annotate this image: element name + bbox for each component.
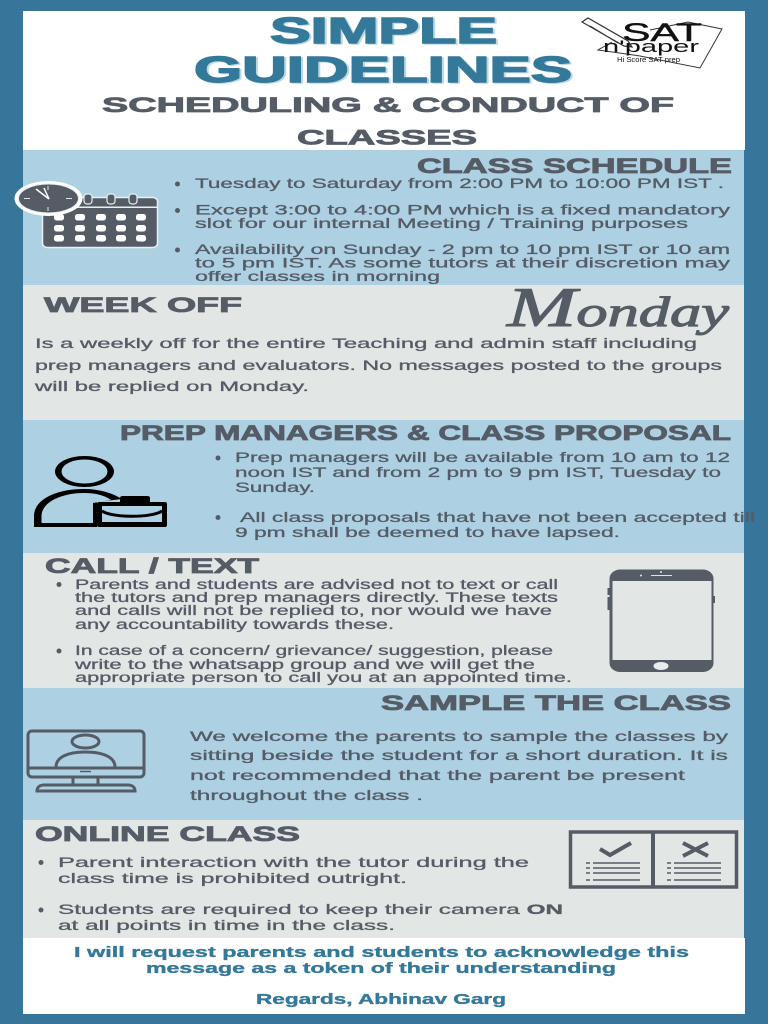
text: call bullets: appropriate person to call you at an appointed time.: [75, 670, 572, 685]
text: call bullets: In case of a concern/ grievance/ suggestion, please: [75, 643, 553, 658]
icon: SAT n paper logo: Hi Score SAT prep: [617, 57, 680, 64]
panel: closing message: [23, 938, 745, 1014]
text: schedule bullets: offer classes in morning: [195, 268, 440, 284]
text: week off description: prep managers and evaluators. No messages posted to the groups: [35, 357, 722, 373]
title: GUIDELINES: [194, 49, 572, 90]
text: prep manager bullets: 9 pm shall be deemed to have lapsed.: [235, 524, 620, 540]
text: schedule bullets: Tuesday to Saturday from 2:00 PM to 10:00 PM IST .: [195, 175, 724, 191]
text: online bullets: Parent interaction with the tutor during the: [58, 854, 529, 870]
title: SIMPLE: [270, 10, 497, 51]
icon: smartphone: [608, 570, 715, 672]
panel: online class: [23, 820, 744, 938]
text: call bullets: any accountability towards these.: [75, 617, 394, 632]
text: acknowledgement request: [74, 945, 689, 977]
text: online bullets: Students are required to keep their camera ON: [58, 901, 563, 917]
subtitle: CLASSES: [297, 126, 477, 150]
text: acknowledgement request: I will request parents and students to acknowledge this: [74, 945, 689, 961]
text: schedule bullets: [175, 175, 730, 284]
heading: class schedule: CLASS SCHEDULE: [417, 155, 732, 178]
text: schedule bullets: Availability on Sunday - 2 pm to 10 pm IST or 10 am: [195, 241, 730, 257]
panel: class schedule: [14, 150, 744, 285]
title: [194, 10, 574, 91]
text: online bullets: at all points in time in the class.: [58, 917, 395, 933]
text: regards: Regards, Abhinav Garg: [256, 992, 506, 1008]
text: sample description: throughout the class .: [190, 787, 423, 803]
text: online bullets: [38, 854, 563, 933]
panel: prep managers: [23, 420, 755, 553]
icon: person with briefcase: [34, 456, 167, 527]
text: prep manager bullets: noon IST and from 2 pm to 9 pm IST, Tuesday to: [235, 464, 721, 480]
text: sample description: not recommended that the parent be present: [190, 767, 685, 783]
text: sample description: We welcome the parents to sample the classes by: [190, 728, 728, 744]
text: week off description: [33, 335, 722, 394]
panel: header: [23, 10, 745, 150]
icon: check and cross list: [570, 832, 736, 887]
text: online bullets: class time is prohibited outright.: [58, 870, 407, 886]
text: call bullets: [56, 577, 572, 685]
panel: call / text: [23, 553, 744, 688]
text: sample description: [190, 728, 728, 803]
text: prep manager bullets: Prep managers will be available from 10 am to 12: [235, 449, 730, 465]
text: prep manager bullets: [216, 449, 755, 540]
icon: monitor with person: [28, 731, 144, 791]
subtitle: SCHEDULING & CONDUCT OF: [102, 94, 674, 117]
panel: week off: [23, 277, 744, 420]
text: call bullets: write to the whatsapp group and we will get the: [73, 657, 535, 672]
text: prep manager bullets: All class proposals that have not been accepted till: [240, 509, 755, 525]
heading: prep managers: PREP MANAGERS & CLASS PROPOSAL: [120, 422, 731, 445]
text: acknowledgement request: message as a token of their understanding: [146, 961, 616, 977]
text: Monday script: M onday: [506, 277, 730, 339]
heading: week off: WEEK OFF: [44, 294, 242, 317]
text: schedule bullets: Except 3:00 to 4:00 PM which is a fixed mandatory: [195, 202, 730, 218]
text: call bullets: and calls will not be replied to, nor would we have: [75, 603, 552, 618]
icon: SAT n paper logo: SAT: [622, 19, 702, 47]
text: week off description: will be replied on Monday.: [33, 378, 309, 394]
heading: sample the class: SAMPLE THE CLASS: [381, 692, 731, 715]
heading: online class: ONLINE CLASS: [35, 823, 300, 846]
panel: sample the class: [23, 688, 744, 820]
icon: SAT n paper logo: [582, 18, 722, 68]
title: SIMPLE: [272, 11, 499, 52]
icon: SAT n paper logo: n'paper: [603, 37, 700, 56]
text: week off description: Is a weekly off for the entire Teaching and admin staff including: [35, 335, 697, 351]
icon: calendar and clock: [14, 181, 158, 248]
text: schedule bullets: to 5 pm IST. As some tutors at their discretion may: [195, 254, 730, 270]
text: call bullets: Parents and students are advised not to text or call: [75, 577, 558, 592]
title: GUIDELINES: [196, 50, 574, 91]
subtitle: [102, 94, 674, 150]
text: prep manager bullets: Sunday.: [235, 479, 315, 495]
text: call bullets: the tutors and prep managers directly. These texts: [75, 590, 558, 605]
text: schedule bullets: slot for our internal Meeting / Training purposes: [195, 215, 688, 231]
heading: call / text: CALL / TEXT: [45, 555, 259, 578]
text: sample description: sitting beside the student for a short duration. It is: [190, 747, 728, 763]
